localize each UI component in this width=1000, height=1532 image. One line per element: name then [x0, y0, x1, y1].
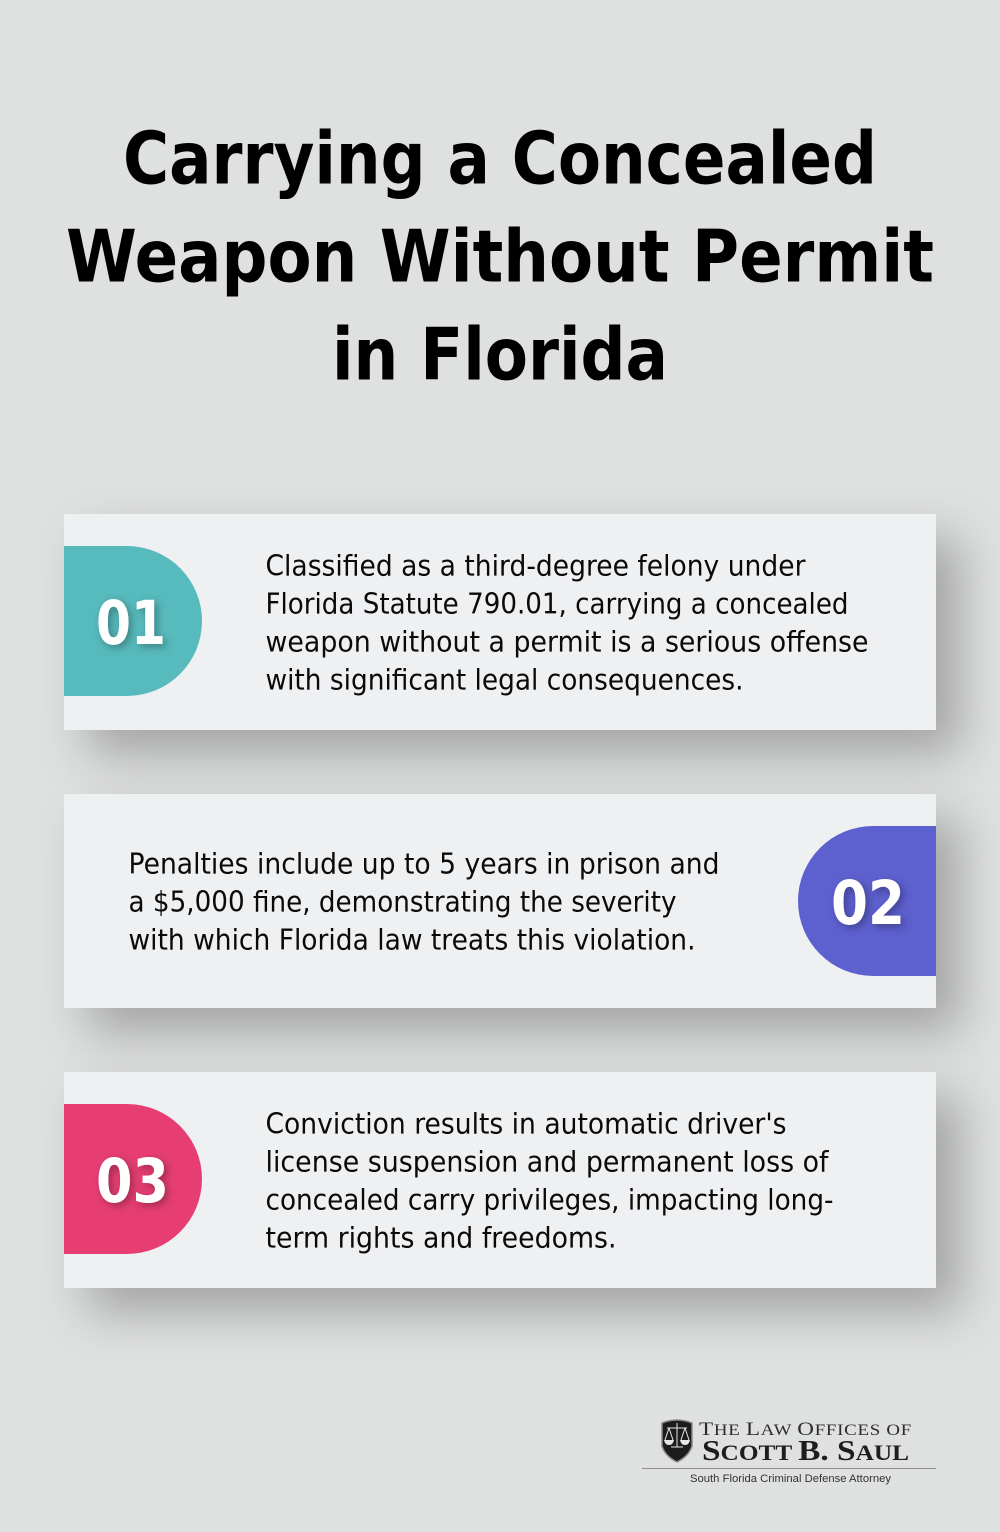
icon: shield with scales: [662, 1420, 692, 1462]
card 1 background: [64, 514, 936, 730]
badge 03: [64, 1104, 202, 1254]
title: [66, 116, 934, 396]
text block 1: [266, 550, 868, 696]
text block 3: term rights and freedoms.: [266, 1222, 616, 1254]
panel: card 2: [64, 794, 936, 1008]
number 03: 03: [96, 1146, 169, 1217]
text block 2: [128, 848, 720, 956]
text block 2: with which Florida law treats this violation.: [128, 924, 696, 956]
number 02: 02: [831, 868, 905, 939]
logo tagline: South Florida Criminal Defense Attorney: [690, 1473, 892, 1485]
panel: card 3: [64, 1072, 936, 1288]
badge 01: [64, 546, 202, 696]
card 2 background: [64, 794, 936, 1008]
text block 3: [266, 1108, 834, 1254]
title: Carrying a Concealed: [123, 116, 877, 200]
text block 2: a $5,000 fine, demonstrating the severity: [128, 886, 677, 918]
text block 3: license suspension and permanent loss of: [266, 1146, 829, 1178]
text block 3: concealed carry privileges, impacting long-: [266, 1184, 834, 1216]
text block 3: Conviction results in automatic driver's: [266, 1108, 786, 1140]
title: in Florida: [332, 312, 668, 396]
badge 02: [798, 826, 936, 976]
logo text: the law offices of: THE LAW OFFICES OF: [699, 1419, 912, 1440]
logo text: scott b. saul: SCOTT B. S AUL: [702, 1435, 909, 1467]
text block 1: weapon without a permit is a serious offense: [266, 626, 868, 658]
panel: card 1: [64, 514, 936, 730]
text block 1: with significant legal consequences.: [266, 664, 744, 696]
text block 1: Classified as a third-degree felony under: [266, 550, 806, 582]
text block 2: Penalties include up to 5 years in prison and: [128, 848, 720, 880]
text block 1: Florida Statute 790.01, carrying a concealed: [266, 588, 848, 620]
card 3 background: [64, 1072, 936, 1288]
number 01: 01: [96, 588, 166, 659]
logo: [642, 1419, 936, 1485]
